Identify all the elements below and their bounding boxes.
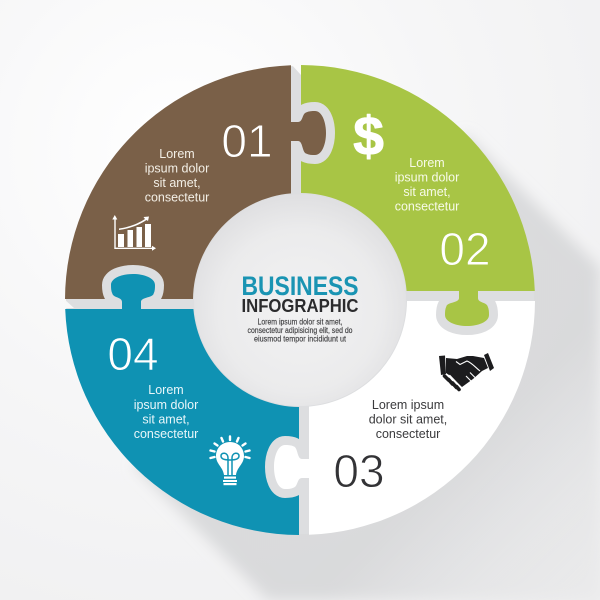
text block 04: consectetur — [134, 427, 198, 441]
knob 04 — [111, 274, 155, 310]
long shadow of ring — [134, 134, 600, 600]
icon: lightbulb — [210, 436, 250, 485]
text block 04: sit amet, — [142, 412, 190, 426]
center text block: Lorem ipsum dolor sit amet, — [258, 318, 342, 326]
text block 01: ipsum dolor — [145, 162, 209, 176]
heading: BUSINESS: BUSINESS — [242, 271, 358, 301]
knob 01 — [290, 111, 326, 155]
number 01: 01 — [221, 115, 273, 167]
icon: handshake — [439, 353, 494, 390]
text block 03: consectetur — [376, 427, 440, 441]
center text block: eiusmod tempor incididunt ut — [254, 334, 347, 344]
base disc in gaps — [66, 66, 534, 534]
icon: dollar: $ — [353, 105, 384, 167]
knob outline 03 — [274, 445, 310, 489]
panel: puzzle ring — [65, 65, 535, 535]
center circle — [194, 194, 406, 406]
knob outline 02 — [445, 290, 489, 326]
text block 01: consectetur — [145, 190, 209, 204]
text block 01 — [145, 147, 209, 204]
segment 03 white base — [309, 301, 535, 535]
text block 02: sit amet, — [403, 185, 451, 199]
text block 03: Lorem ipsum — [372, 398, 444, 412]
center text block: consectetur adipisicing elit, sed do — [248, 326, 353, 335]
gap corner notch top — [291, 64, 301, 75]
knob 02 — [445, 290, 489, 326]
segment 01 brown base — [65, 65, 291, 299]
heading: INFOGRAPHIC: INFOGRAPHIC — [242, 296, 359, 316]
center text block — [248, 318, 353, 344]
icon: handshake highlight — [450, 361, 480, 386]
text block 04 — [134, 383, 198, 441]
number 02: 02 — [439, 223, 491, 275]
knob 03 — [274, 445, 310, 489]
knob outline 04 — [111, 274, 155, 310]
knob outline 01 — [290, 111, 326, 155]
gap corner notch left — [64, 299, 74, 308]
text block 02: consectetur — [395, 200, 459, 214]
number 04: 04 — [107, 328, 159, 380]
text block 02 — [395, 156, 459, 214]
number 03: 03 — [333, 445, 385, 497]
text block 01: Lorem — [159, 147, 195, 161]
center heading — [242, 271, 359, 344]
text block 02: ipsum dolor — [395, 170, 459, 184]
segment 02 green base — [301, 65, 535, 291]
text block 04: ipsum dolor — [134, 398, 198, 412]
icon: bar chart — [112, 215, 156, 251]
text block 03 — [369, 398, 447, 441]
text block 04: Lorem — [148, 383, 184, 397]
segment 04 blue base — [65, 309, 299, 535]
text block 01: sit amet, — [153, 176, 201, 190]
text block 03: dolor sit amet, — [369, 412, 447, 426]
text block 02: Lorem — [409, 156, 445, 170]
